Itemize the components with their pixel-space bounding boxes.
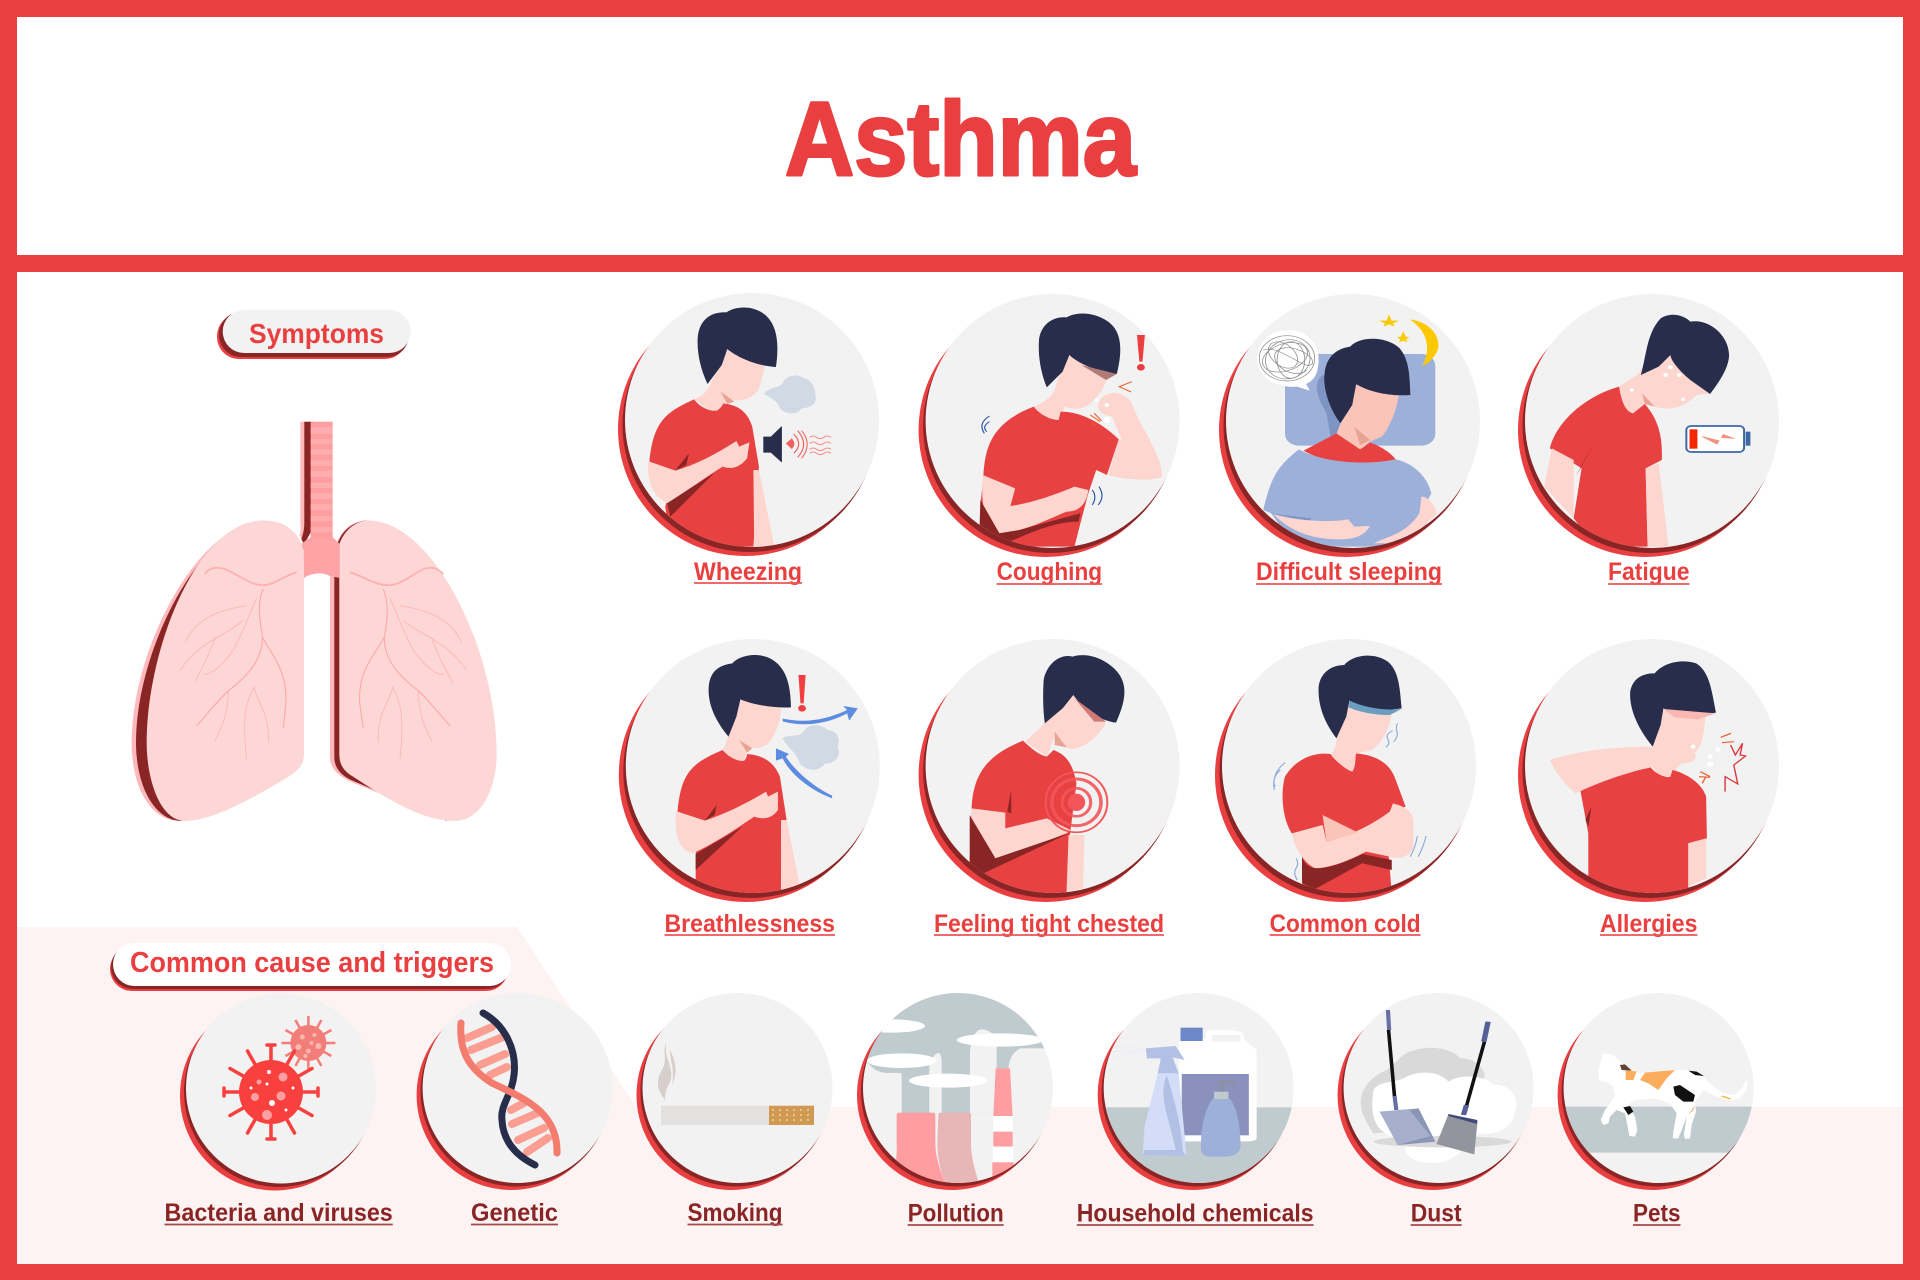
symptom: Common cold: [1215, 639, 1476, 938]
panel: triggers background: [17, 927, 1903, 1264]
label: Genetic: Genetic: [471, 1199, 558, 1227]
trigger: Bacteria and viruses: [164, 994, 393, 1227]
icon: speaker: [763, 426, 782, 463]
large virus: [224, 1045, 318, 1139]
trigger: Pets: [1558, 993, 1773, 1228]
label: Difficult sleeping: Difficult sleeping: [1256, 558, 1442, 586]
trigger: Smoking: [636, 993, 832, 1227]
symptom: Feeling tight chested: [919, 639, 1180, 938]
symptom: Fatigue: [1518, 294, 1779, 586]
shake lines: [982, 416, 1102, 505]
trigger: Household chemicals: [1077, 993, 1314, 1228]
shiver lines: [1274, 723, 1426, 880]
jug: [1179, 1030, 1257, 1141]
icon: low battery: [1686, 426, 1750, 452]
symptom: Allergies: [1518, 639, 1779, 938]
figure: man wheezing: [648, 307, 831, 547]
pillow: [1285, 354, 1435, 446]
label: Smoking: Smoking: [688, 1199, 782, 1227]
icon: DNA helix: [461, 1013, 557, 1165]
icon: factory chimneys and smoke: [866, 993, 1044, 1183]
icon: sound waves: [786, 431, 831, 458]
exclamation mark: [1137, 335, 1145, 362]
heading: Common cause and triggers: Common cause and triggers: [130, 947, 494, 979]
trigger: Dust: [1338, 993, 1534, 1228]
label: Allergies: Allergies: [1600, 910, 1697, 938]
trigger: Genetic: [417, 993, 613, 1227]
symptom: Difficult sleeping: [1219, 294, 1480, 586]
sneeze burst: [1699, 733, 1746, 792]
title: Asthma: [785, 81, 1137, 198]
label: Pets: Pets: [1633, 1200, 1680, 1228]
figure: tired man: [1544, 315, 1750, 547]
left lung: [132, 520, 304, 821]
figure: man out of breath: [676, 655, 858, 893]
figure: man coughing: [980, 314, 1162, 547]
heading: Symptoms: [217, 310, 411, 359]
figure: shivering man: [1274, 656, 1426, 893]
icon: cigarette: [658, 1043, 814, 1125]
jug cap: [1181, 1028, 1203, 1041]
blanket: [1263, 449, 1437, 547]
label: Pollution: Pollution: [908, 1200, 1004, 1228]
smoke cloud: [764, 376, 816, 413]
figure: man lying awake: [1257, 314, 1438, 547]
figure: man sneezing into elbow: [1550, 661, 1746, 893]
icon: chest pain rings: [1046, 772, 1107, 832]
icon: calico cat on floor: [1560, 1053, 1773, 1153]
trachea: [299, 422, 339, 578]
small virus: [281, 1016, 335, 1070]
label: Fatigue: Fatigue: [1608, 558, 1690, 586]
icon: viruses: [224, 1016, 335, 1139]
label: Coughing: Coughing: [997, 558, 1102, 586]
right lung: [330, 520, 497, 821]
symptom: Coughing: [919, 294, 1180, 586]
label: Dust: Dust: [1411, 1200, 1462, 1228]
heading: Common cause and triggers: [110, 943, 511, 991]
arrows: breath out and in: [776, 706, 858, 798]
label: Bacteria and viruses: Bacteria and viruses: [164, 1199, 393, 1227]
spray bottle: [1146, 1046, 1185, 1073]
moon and stars: [1410, 319, 1438, 366]
icon: cleaning bottles: [1098, 1028, 1296, 1187]
trigger: Pollution: [857, 990, 1060, 1228]
figure: man with chest pain: [970, 655, 1124, 893]
label: Common cold: Common cold: [1270, 910, 1421, 938]
small bottle: [1201, 1098, 1240, 1157]
label: Feeling tight chested: Feeling tight chested: [934, 910, 1164, 938]
symptom: Breathlessness: [619, 639, 880, 938]
heading: Symptoms: Symptoms: [249, 318, 384, 349]
sweat drops: [1630, 365, 1685, 401]
exclamation mark: [798, 675, 806, 703]
smoke cloud: [783, 725, 839, 770]
icon: dustpan, broom and dust: [1361, 1010, 1516, 1163]
lungs illustration: [132, 422, 497, 821]
label: Breathlessness: Breathlessness: [664, 910, 835, 938]
symptom: Wheezing: [618, 293, 879, 586]
speech bubble with tangled thoughts: [1257, 330, 1319, 391]
label: Household chemicals: Household chemicals: [1077, 1200, 1314, 1228]
label: Wheezing: Wheezing: [694, 558, 802, 586]
cough sparks: [1090, 382, 1132, 425]
